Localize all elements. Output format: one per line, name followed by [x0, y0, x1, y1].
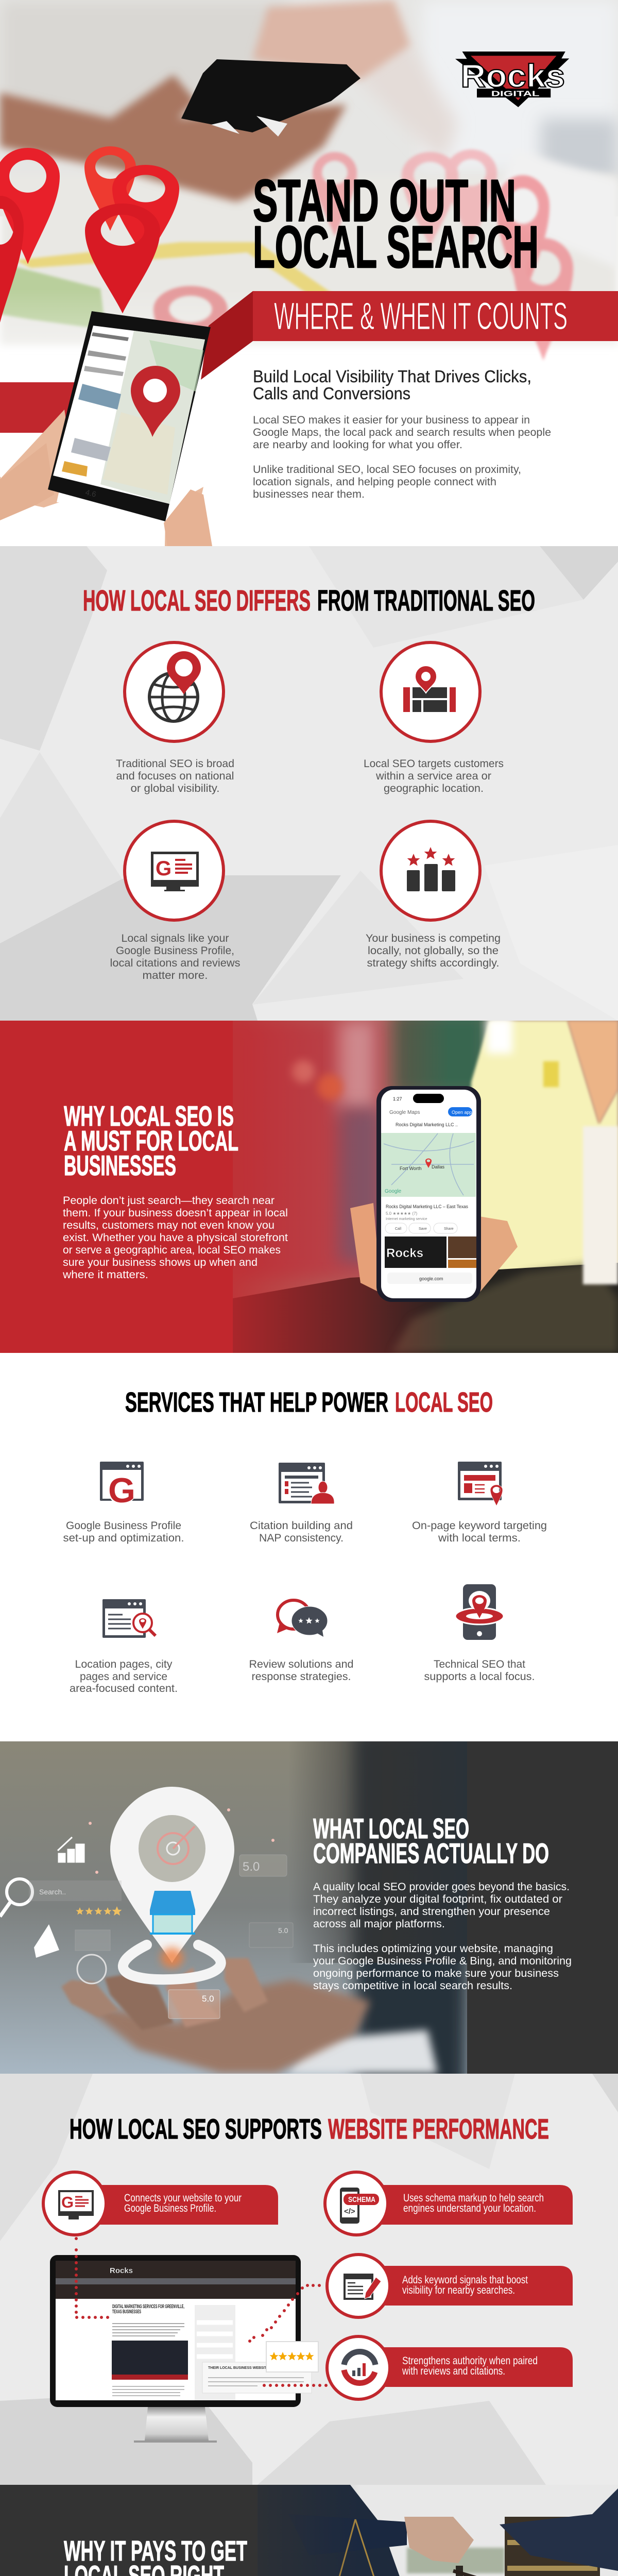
text: citation building: Citation building and [250, 1520, 353, 1532]
icon: monitor with Google: G [156, 857, 171, 880]
text: technical SEO: supports a local focus. [424, 1671, 535, 1683]
icon: review bubbles [277, 1600, 328, 1637]
heading [64, 1106, 238, 1176]
callout: connects to Google Business Profile: G [61, 2193, 74, 2211]
phone showing Google Maps: Dallas [432, 1164, 445, 1170]
callout: authority [327, 2336, 573, 2399]
paragraph: or serve a geographic area, local SEO makes [63, 1244, 281, 1256]
text: Google Business Profile [63, 1520, 184, 1544]
callout: connects to Google Business Profile: Connects your website to your [124, 2192, 242, 2204]
callout: schema markup: </> [344, 2207, 355, 2216]
phone showing Google Maps: 1:27 [393, 1096, 402, 1101]
paragraph: exist. Whether you have a physical storefront [63, 1232, 288, 1244]
phone showing Google Maps: google.com [419, 1276, 443, 1281]
panel: website performance [0, 2074, 618, 2485]
callout: schema markup: Uses schema markup to help search [403, 2192, 544, 2204]
text: competing locally [366, 933, 501, 969]
heading: HOW LOCAL SEO DIFFERS [83, 584, 311, 617]
hero photo: hands, phone and map with pins [0, 0, 618, 345]
hero section [0, 0, 618, 546]
red location pins [0, 146, 573, 381]
paragraph: People don’t just search—they search near [63, 1195, 274, 1207]
text: local signals: local citations and reviews [110, 957, 240, 969]
monitor with website: THEIR LOCAL BUSINESS WEBSITES ROCK [208, 2366, 283, 2370]
text: on-page targeting [412, 1520, 547, 1544]
paragraph: where it matters. [62, 1269, 148, 1281]
intro heading: Calls and Conversions [253, 384, 410, 403]
paragraphs: your Google Business Profile & Bing, and monitoring [313, 1955, 572, 1967]
red ribbon with subtitle [0, 291, 618, 433]
tablet held in hands showing map: 4.6 [84, 488, 97, 499]
callout: schema markup: engines understand your location. [403, 2202, 536, 2214]
text: review solutions: response strategies. [251, 1671, 351, 1683]
photo: hand with floating pin [0, 1731, 618, 2092]
intro paragraphs: are nearby and looking for what you offer. [253, 439, 462, 451]
panel: why it pays [0, 2485, 618, 2576]
callout: keyword signals: Adds keyword signals that boost [402, 2274, 528, 2286]
text: location pages: area-focused content. [70, 1683, 178, 1694]
paragraph: results, customers may not even know you [63, 1219, 274, 1231]
phone showing Google Maps: Internet marketing service [386, 1217, 427, 1221]
text: local signals [110, 933, 240, 981]
panel: why local SEO is a must [0, 1010, 618, 1353]
text: Google Business Profile: Google Business Profile [66, 1520, 181, 1532]
phone showing Google Maps: Open app [452, 1110, 472, 1115]
logo: Rocks Digital: DIGITAL [491, 89, 540, 98]
text: review solutions: Review solutions and [249, 1658, 353, 1670]
text: local signals: Local signals like your [122, 933, 229, 944]
phone showing Google Maps: Share [444, 1227, 454, 1231]
intro paragraphs: Local SEO makes it easier for your business to appear in [253, 414, 530, 426]
paragraph [62, 1195, 288, 1281]
heading: WHY IT PAYS TO GET [64, 2535, 247, 2567]
phone showing Google Maps: Rocks [386, 1246, 423, 1260]
text: traditional SEO [116, 758, 234, 794]
intro paragraphs: location signals, and helping people connect with [253, 476, 496, 488]
logo: Rocks Digital: Rocks [460, 58, 565, 94]
callout: keyword signals: visibility for nearby searches. [402, 2284, 515, 2296]
phone showing Google Maps: 5.0 ★★★★★ (7) [386, 1211, 418, 1216]
heading: WHY LOCAL SEO IS [64, 1100, 234, 1132]
text: competing locally: strategy shifts accordingly. [367, 957, 500, 969]
monitor with website [50, 2255, 318, 2443]
text: local signals: Google Business Profile, [116, 945, 234, 957]
photo collage: lawyer, doctor and plumber [0, 2485, 618, 2576]
title [253, 168, 539, 280]
text: Google Business Profile: set-up and optimization. [63, 1532, 184, 1544]
panel: what local SEO companies do [0, 1731, 618, 2092]
paragraphs: ongoing performance to make sure your business [313, 1968, 559, 1979]
icon: globe with pin [125, 642, 224, 741]
intro heading: Build Local Visibility That Drives Clicks, [253, 367, 531, 386]
icon: citation listing [279, 1463, 334, 1504]
intro paragraphs [253, 414, 551, 500]
floating icons and review cards: Search.. [39, 1888, 66, 1896]
callout: authority: with reviews and citations. [402, 2365, 505, 2377]
callout: connects to Google Business Profile [43, 2172, 278, 2235]
icon: technical SEO phone [455, 1584, 504, 1640]
callout: authority: Strengthens authority when paired [402, 2355, 538, 2367]
text: local SEO targets: geographic location. [384, 783, 484, 794]
phone showing Google Maps: Google Maps [389, 1110, 420, 1115]
heading: LOCAL SEO [395, 1387, 493, 1418]
icon: ranking bars and stars [381, 821, 480, 920]
text: location pages: pages and service [80, 1671, 167, 1683]
heading [64, 2535, 247, 2576]
paragraphs: They analyze your digital footprint, fix outdated or [313, 1893, 562, 1905]
phone showing Google Maps: Google [385, 1189, 402, 1194]
icon: Google browser: G [108, 1471, 135, 1510]
paragraph: sure your business shows up when and [63, 1257, 258, 1268]
logo: Rocks Digital [455, 52, 569, 107]
icon: service area map [381, 642, 480, 741]
text: location pages: Location pages, city [75, 1658, 173, 1670]
intro paragraphs: Unlike traditional SEO, local SEO focuses on proximity, [253, 464, 521, 476]
paragraphs: across all major platforms. [313, 1918, 445, 1930]
monitor with website: Rocks [110, 2266, 133, 2275]
intro heading [253, 370, 530, 400]
heading: HOW LOCAL SEO SUPPORTS [70, 2113, 322, 2145]
text: local SEO targets: within a service area or [375, 770, 491, 782]
text: local SEO targets: Local SEO targets customers [364, 758, 504, 770]
phone showing Google Maps [350, 1086, 518, 1302]
floating icons and review cards: 5.0 [278, 1926, 288, 1935]
paragraphs: This includes optimizing your website, managing [313, 1943, 553, 1955]
paragraphs: stays competitive in local search results. [313, 1980, 512, 1992]
text: competing locally: locally, not globally, so the [368, 945, 499, 957]
dotted connectors [75, 2237, 328, 2387]
monitor with website: TEXAS BUSINESSES [112, 2309, 141, 2315]
icon: Google browser [100, 1462, 144, 1510]
text: competing locally: Your business is competing [366, 933, 501, 944]
photo: street scene with hand holding phone [233, 1021, 618, 1353]
phone showing Google Maps: Call [395, 1227, 402, 1231]
text: traditional SEO: or global visibility. [131, 783, 219, 794]
floating icons and review cards: 5.0 [243, 1860, 260, 1874]
paragraphs: A quality local SEO provider goes beyond the basics. [313, 1881, 570, 1893]
text: technical SEO [424, 1658, 535, 1683]
floating white pin with store [110, 1787, 234, 1979]
text: traditional SEO: Traditional SEO is broad [116, 758, 234, 770]
text: local signals: matter more. [142, 970, 208, 981]
phone showing Google Maps: Fort Worth [400, 1166, 421, 1171]
red panel [0, 1021, 233, 1353]
intro paragraphs: Google Maps, the local pack and search results when people [253, 427, 551, 438]
floating icons and review cards: 5.0 [202, 1994, 214, 2004]
text: traditional SEO: and focuses on national [116, 770, 234, 782]
panel: how local SEO differs [0, 546, 618, 1021]
intro paragraphs: businesses near them. [253, 488, 365, 500]
monitor with website: DIGITAL MARKETING SERVICES FOR GREENVILLE, [112, 2304, 184, 2310]
callout: keyword signals [327, 2255, 573, 2317]
heading [313, 1818, 548, 1864]
text: local SEO targets [364, 758, 504, 794]
paragraph: them. If your business doesn’t appear in local [63, 1207, 288, 1219]
tablet held in hands showing map [0, 311, 212, 546]
icon: location pages [102, 1599, 156, 1638]
heading: WHAT LOCAL SEO [313, 1812, 469, 1844]
phone showing Google Maps: Save [419, 1227, 427, 1231]
heading: SERVICES THAT HELP POWER [125, 1387, 388, 1418]
phone showing Google Maps: Rocks Digital Marketing LLC .. [396, 1122, 458, 1127]
text: technical SEO: Technical SEO that [434, 1658, 525, 1670]
heading: BUSINESSES [64, 1149, 176, 1181]
text: citation building: NAP consistency. [259, 1532, 344, 1544]
text: location pages [70, 1658, 178, 1694]
heading: A MUST FOR LOCAL [64, 1125, 238, 1157]
paragraphs [313, 1881, 572, 1992]
text: on-page targeting: On-page keyword targeting [412, 1520, 547, 1532]
icon: monitor with Google [125, 821, 224, 920]
paragraphs: incorrect listings, and strengthen your presence [313, 1906, 550, 1918]
callout: connects to Google Business Profile: Google Business Profile. [124, 2202, 216, 2214]
floating icons and review cards [0, 1808, 293, 2019]
icon: on-page keyword [458, 1462, 503, 1506]
text: on-page targeting: with local terms. [438, 1532, 521, 1544]
panel: services [0, 1353, 618, 1741]
phone showing Google Maps: Rocks Digital Marketing LLC – East Texas [386, 1204, 468, 1210]
text: citation building [250, 1520, 353, 1544]
text: review solutions [249, 1658, 353, 1683]
callout: schema markup: SCHEMA [348, 2195, 375, 2204]
callout: schema markup [325, 2172, 573, 2235]
